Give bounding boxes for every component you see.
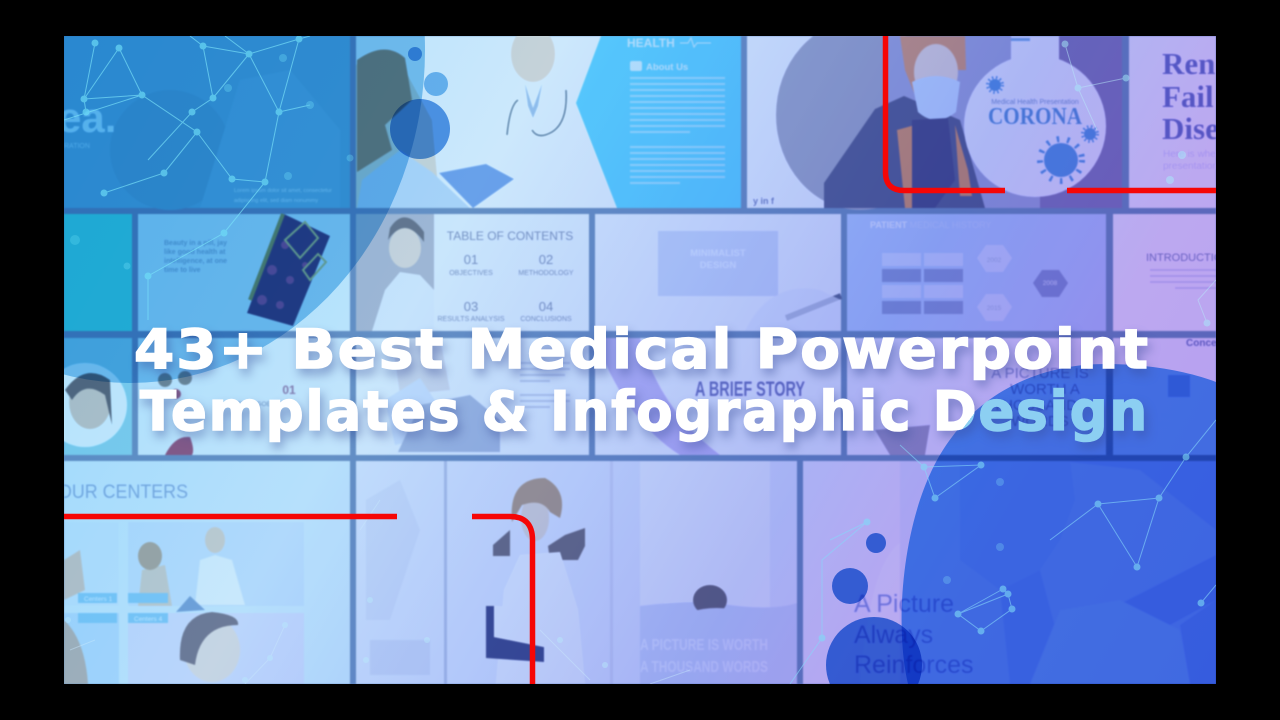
bubble large top bbox=[390, 99, 450, 159]
flask badge: Medical Health Presentation bbox=[991, 99, 1079, 106]
flask badge: CORONA bbox=[988, 104, 1083, 130]
panel: dark idea slide: adipiscing elit, sed diam nonummy bbox=[234, 198, 318, 204]
panel: a picture is worth slide: A PICTURE IS bbox=[991, 365, 1089, 382]
panel: dark idea slide bbox=[58, 36, 350, 210]
panel: corona slide bbox=[747, 20, 1122, 210]
panel: table of contents slide: CONCLUSIONS bbox=[520, 316, 572, 323]
bubble medium top bbox=[424, 72, 448, 96]
panel: renal failure slide: Dise bbox=[1162, 111, 1219, 146]
flask badge bbox=[964, 36, 1106, 197]
bubble small bottom bbox=[866, 533, 886, 553]
panel: renal failure slide bbox=[1129, 36, 1220, 208]
panel: concept planet slide: Mercury is the bbox=[1161, 414, 1199, 420]
icon: large virus bbox=[1040, 139, 1082, 181]
center labels: Centers 1 bbox=[84, 596, 113, 603]
network: bottom right bbox=[790, 420, 1216, 684]
big circle top left bbox=[0, 0, 425, 383]
caption panel bbox=[640, 585, 797, 684]
panel: introduction slide: INTRODUCTION bbox=[1146, 252, 1230, 264]
panel: patient medical history slide: PATIENT MEDICAL HISTORY bbox=[870, 220, 992, 230]
panel: table of contents slide: 02 bbox=[539, 252, 553, 267]
panel: table of contents slide: 04 bbox=[539, 299, 553, 314]
panel: table of contents slide: 01 bbox=[464, 252, 478, 267]
red frame: top right bbox=[886, 36, 1216, 190]
panel: dark idea slide: RATION bbox=[64, 143, 90, 150]
icon: small virus left bbox=[988, 78, 1002, 92]
panel: table of contents slide: RESULTS ANALYSIS bbox=[437, 316, 505, 323]
panel: table of contents slide: TABLE OF CONTENTS bbox=[447, 229, 573, 243]
panel: teal slide bbox=[64, 214, 132, 331]
panel: renal failure slide: presentation bbox=[1163, 161, 1218, 172]
photo: men faces bbox=[900, 461, 1216, 684]
bubble large bottom bbox=[826, 617, 922, 713]
big circle bottom right bbox=[902, 364, 1216, 684]
title line 1: 43+ Best Medical Powerpoint bbox=[134, 318, 1150, 381]
panel: masked men slide bbox=[803, 461, 1216, 684]
network: top right bbox=[1062, 40, 1216, 326]
photo: scientist bbox=[486, 478, 585, 684]
panel: lab scientist slide bbox=[356, 461, 797, 684]
panel: dark idea slide: Lorem ipsum dolor sit amet, consectetur bbox=[234, 188, 332, 194]
panel: introduction slide bbox=[1113, 214, 1230, 331]
title bbox=[134, 318, 1150, 443]
panel: patient medical history slide bbox=[847, 214, 1106, 331]
panel: concept planet slide bbox=[1113, 338, 1217, 455]
bubble medium bottom bbox=[832, 568, 868, 604]
panel: title goes here slide: 01 bbox=[282, 383, 296, 397]
panel: masked men slide: A Picture bbox=[854, 590, 954, 618]
panel: concept planet slide: Conce bbox=[1186, 338, 1217, 349]
red frame: bottom left bbox=[64, 516, 532, 684]
panel: minimalist design slide bbox=[595, 214, 841, 331]
panel: brief story slide bbox=[595, 338, 841, 455]
panel: patient medical history slide: 2008 bbox=[1043, 280, 1058, 287]
panel: minimalist design slide: MINIMALIST bbox=[690, 248, 746, 259]
panel: table of contents slide: 03 bbox=[464, 299, 478, 314]
phone case bbox=[247, 214, 330, 326]
center labels: Centers 4 bbox=[134, 616, 163, 623]
title line 2: Templates & Infographic Design bbox=[140, 380, 1149, 443]
caption panel: A THOUSAND WORDS bbox=[640, 659, 768, 676]
panel: pill slide: Beauty in a pill, jay bbox=[164, 240, 227, 247]
panel: doctor slide bbox=[356, 26, 741, 208]
panel: dark idea slide: ea. bbox=[58, 94, 116, 141]
panel: concept planet slide: closest planet to bbox=[1158, 422, 1202, 428]
panel: concept planet slide: Jack A bbox=[1171, 406, 1189, 412]
center labels bbox=[78, 593, 168, 623]
panel: a picture is worth slide bbox=[847, 338, 1106, 455]
panel: pill slide: like good health at bbox=[164, 249, 226, 256]
panel: title goes here slide bbox=[138, 338, 350, 455]
panel: our centers slide bbox=[58, 461, 350, 684]
panel: brief story slide: A BRIEF STORY bbox=[695, 378, 805, 401]
panel: a picture is worth slide: WORTH A bbox=[1010, 381, 1080, 398]
blue text panel bbox=[576, 36, 741, 208]
bubble small top bbox=[408, 47, 422, 61]
network: top left bbox=[64, 36, 354, 320]
panel: minimalist design slide: DESIGN bbox=[700, 260, 736, 271]
panel: renal failure slide: Here is wher bbox=[1163, 149, 1220, 160]
panel: table of contents slide: OBJECTIVES bbox=[449, 270, 493, 277]
panel: table of contents slide: METHODOLOGY bbox=[518, 270, 574, 277]
panel: masked men slide: Reinforces bbox=[854, 651, 974, 679]
panel: our centers slide: OUR CENTERS bbox=[58, 482, 188, 503]
panel: pill slide: intelligence, at one bbox=[164, 258, 227, 265]
panel: renal failure slide: Fail bbox=[1162, 79, 1214, 114]
blue text panel: About Us bbox=[646, 62, 688, 73]
icon: tablet bbox=[439, 164, 514, 208]
network: bottom left bbox=[65, 500, 690, 684]
caption panel: A PICTURE IS WORTH bbox=[640, 637, 768, 654]
panel: table of contents slide bbox=[356, 214, 589, 331]
icon: small virus right bbox=[1082, 126, 1098, 142]
photo: doctor and patient bbox=[138, 527, 245, 612]
panel: renal failure slide: Ren bbox=[1162, 46, 1215, 81]
panel: patient medical history slide: 2002 bbox=[987, 257, 1002, 264]
panel: pill slide bbox=[138, 214, 350, 331]
blue text panel: HEALTH bbox=[627, 36, 675, 50]
panel: masked men slide: Always bbox=[854, 621, 933, 649]
photo: woman patient bbox=[356, 49, 470, 208]
photo: woman in mask bbox=[824, 36, 985, 208]
social icons: y in f bbox=[753, 196, 775, 206]
photo: doctor bbox=[506, 36, 568, 137]
photo: plant bbox=[493, 528, 585, 560]
panel: a picture is worth slide: THOUSAND bbox=[993, 397, 1077, 414]
panel: pill slide: time to live bbox=[164, 267, 201, 274]
panel: microscope scientist slide bbox=[356, 338, 589, 455]
panel: a picture is worth slide: WORDS bbox=[1011, 413, 1069, 430]
photo: patient face bbox=[180, 612, 240, 682]
panel: concept planet slide: the Sun bbox=[1170, 430, 1190, 436]
panel: woman in circle slide bbox=[43, 338, 132, 455]
panel: patient medical history slide: 2015 bbox=[987, 305, 1002, 312]
panel: title goes here slide: TITLE GOES HERE bbox=[237, 401, 296, 408]
